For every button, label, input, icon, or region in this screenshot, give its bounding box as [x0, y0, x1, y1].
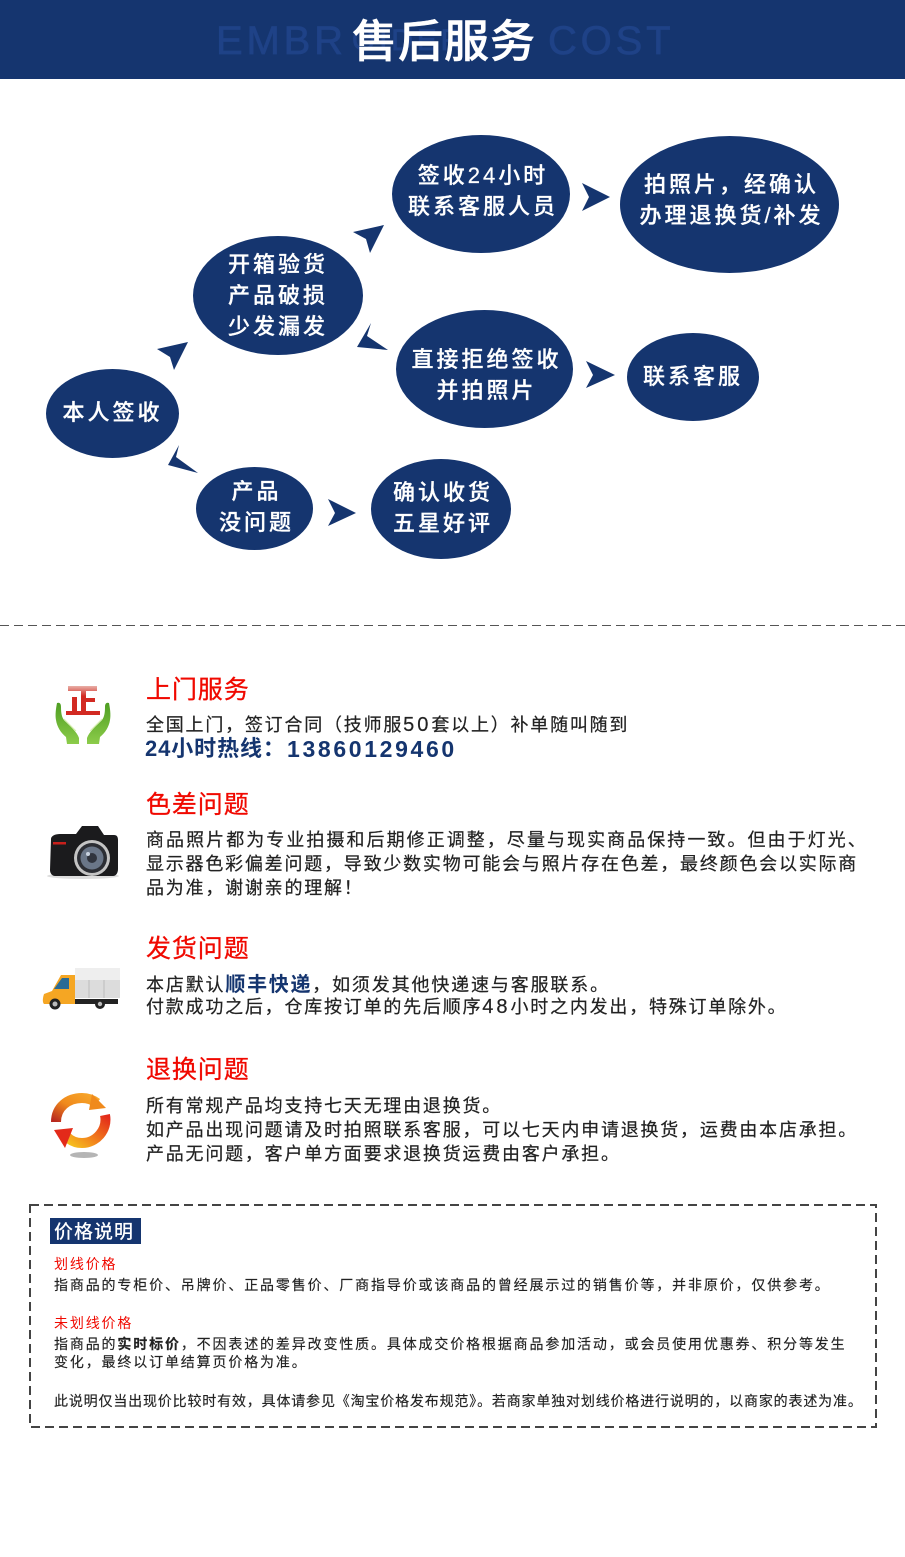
arrow: to contact [586, 361, 615, 388]
section: returns: 如产品出现问题请及时拍照联系客服，可以七天内申请退换货，运费由本店承担。 [146, 1120, 858, 1140]
node: confirm receipt: 确认收货 [393, 480, 493, 505]
node: confirm receipt: 五星好评 [393, 511, 493, 536]
arrow: to product ok [168, 445, 198, 473]
panel: price explanation [29, 1204, 877, 1428]
node: contact within 24 hours: 签收24小时 [418, 163, 548, 188]
closing note: 此说明仅当出现价比较时有效，具体请参见《淘宝价格发布规范》。若商家单独对划线价格进行说明的，以商家的表述为准。 [54, 1393, 863, 1409]
node: signed by yourself [46, 369, 179, 458]
node: refuse and take photos [396, 310, 573, 428]
icon: exchange arrows [51, 1093, 110, 1158]
node: product ok: 产品 [231, 479, 282, 504]
section: shipping [42, 935, 787, 1018]
body text: 商品照片都为专业拍摄和后期修正调整，尽量与现实商品保持一致。但由于灯光、 [146, 830, 868, 850]
icon: delivery truck [42, 968, 120, 1010]
node: signed by yourself: 本人签收 [62, 400, 162, 425]
ghost english title: OIDERY [352, 24, 489, 57]
heading: 发货问题 [146, 935, 250, 963]
node: photo and return [620, 136, 839, 273]
node: inspect on opening: 开箱验货 [228, 252, 328, 277]
panel heading: 价格说明 [54, 1222, 134, 1243]
strikethrough price heading: 划线价格 [54, 1256, 117, 1272]
node: inspect on opening: 产品破损 [228, 283, 328, 308]
heading: 色差问题 [146, 791, 250, 819]
section: color difference [47, 791, 868, 898]
header banner [0, 0, 905, 79]
body text: 所有常规产品均支持七天无理由退换货。 [146, 1096, 502, 1116]
node: inspect on opening [193, 236, 363, 355]
strikethrough price text: 指商品的专柜价、吊牌价、正品零售价、厂商指导价或该商品的曾经展示过的销售价等，并非原价，仅供参考。 [54, 1277, 831, 1293]
ghost english title: COST [548, 19, 674, 63]
heading: 上门服务 [146, 676, 250, 704]
section: returns: 产品无问题，客户单方面要求退换货运费由客户承担。 [146, 1144, 621, 1164]
ghost english title: EMBR [216, 19, 347, 63]
arrow: to 24 hours [353, 225, 384, 253]
section: color difference: 显示器色彩偏差问题，导致少数实物可能会与照片存在色差，最终颜色会以实际商 [146, 854, 858, 874]
node: product ok: 没问题 [219, 510, 294, 535]
title: 售后服务 [352, 16, 536, 67]
flow chart: after-sales process [46, 135, 839, 559]
hotline: 13860129460 [287, 736, 457, 762]
node: product ok [196, 467, 313, 550]
node: photo and return: 拍照片，经确认 [644, 172, 819, 197]
heading: 退换问题 [146, 1056, 250, 1084]
node: refuse and take photos: 直接拒绝签收 [411, 347, 562, 372]
arrow: to confirm [328, 499, 356, 526]
non-strikethrough price heading: 未划线价格 [54, 1315, 133, 1331]
arrow: to photo [582, 183, 610, 211]
ghost english title [216, 19, 674, 63]
non-strikethrough price text: 指商品的实时标价，不因表述的差异改变性质。具体成交价格根据商品参加活动，或会员使用优惠券、积分等发生 [54, 1336, 847, 1352]
section: shipping: 付款成功之后，仓库按订单的先后顺序48小时之内发出，特殊订单除外。 [146, 996, 787, 1018]
body text: 全国上门，签订合同（技师服50套以上）补单随叫随到 [146, 714, 629, 736]
hotline [145, 736, 457, 762]
section: returns [51, 1056, 858, 1164]
section: color difference: 品为准，谢谢亲的理解！ [146, 878, 364, 898]
body text: 本店默认顺丰快递，如须发其他快递速与客服联系。 [146, 974, 610, 996]
node: contact within 24 hours [392, 135, 570, 253]
hotline: 24小时热线： [145, 736, 286, 761]
arrow: to inspect [157, 342, 188, 370]
node: confirm receipt [371, 459, 511, 559]
icon: camera [47, 826, 119, 879]
node: contact within 24 hours: 联系客服人员 [408, 194, 558, 219]
node: photo and return: 办理退换货/补发 [639, 203, 824, 228]
panel: price explanation: 变化，最终以订单结算页价格为准。 [54, 1354, 308, 1370]
node: contact service: 联系客服 [643, 364, 743, 389]
section: on-site service [56, 676, 629, 762]
node: inspect on opening: 少发漏发 [228, 314, 328, 339]
node: contact service [627, 333, 759, 421]
node: refuse and take photos: 并拍照片 [436, 378, 536, 403]
icon: hands holding genuine mark [56, 686, 110, 744]
arrow: to refuse [357, 323, 388, 350]
